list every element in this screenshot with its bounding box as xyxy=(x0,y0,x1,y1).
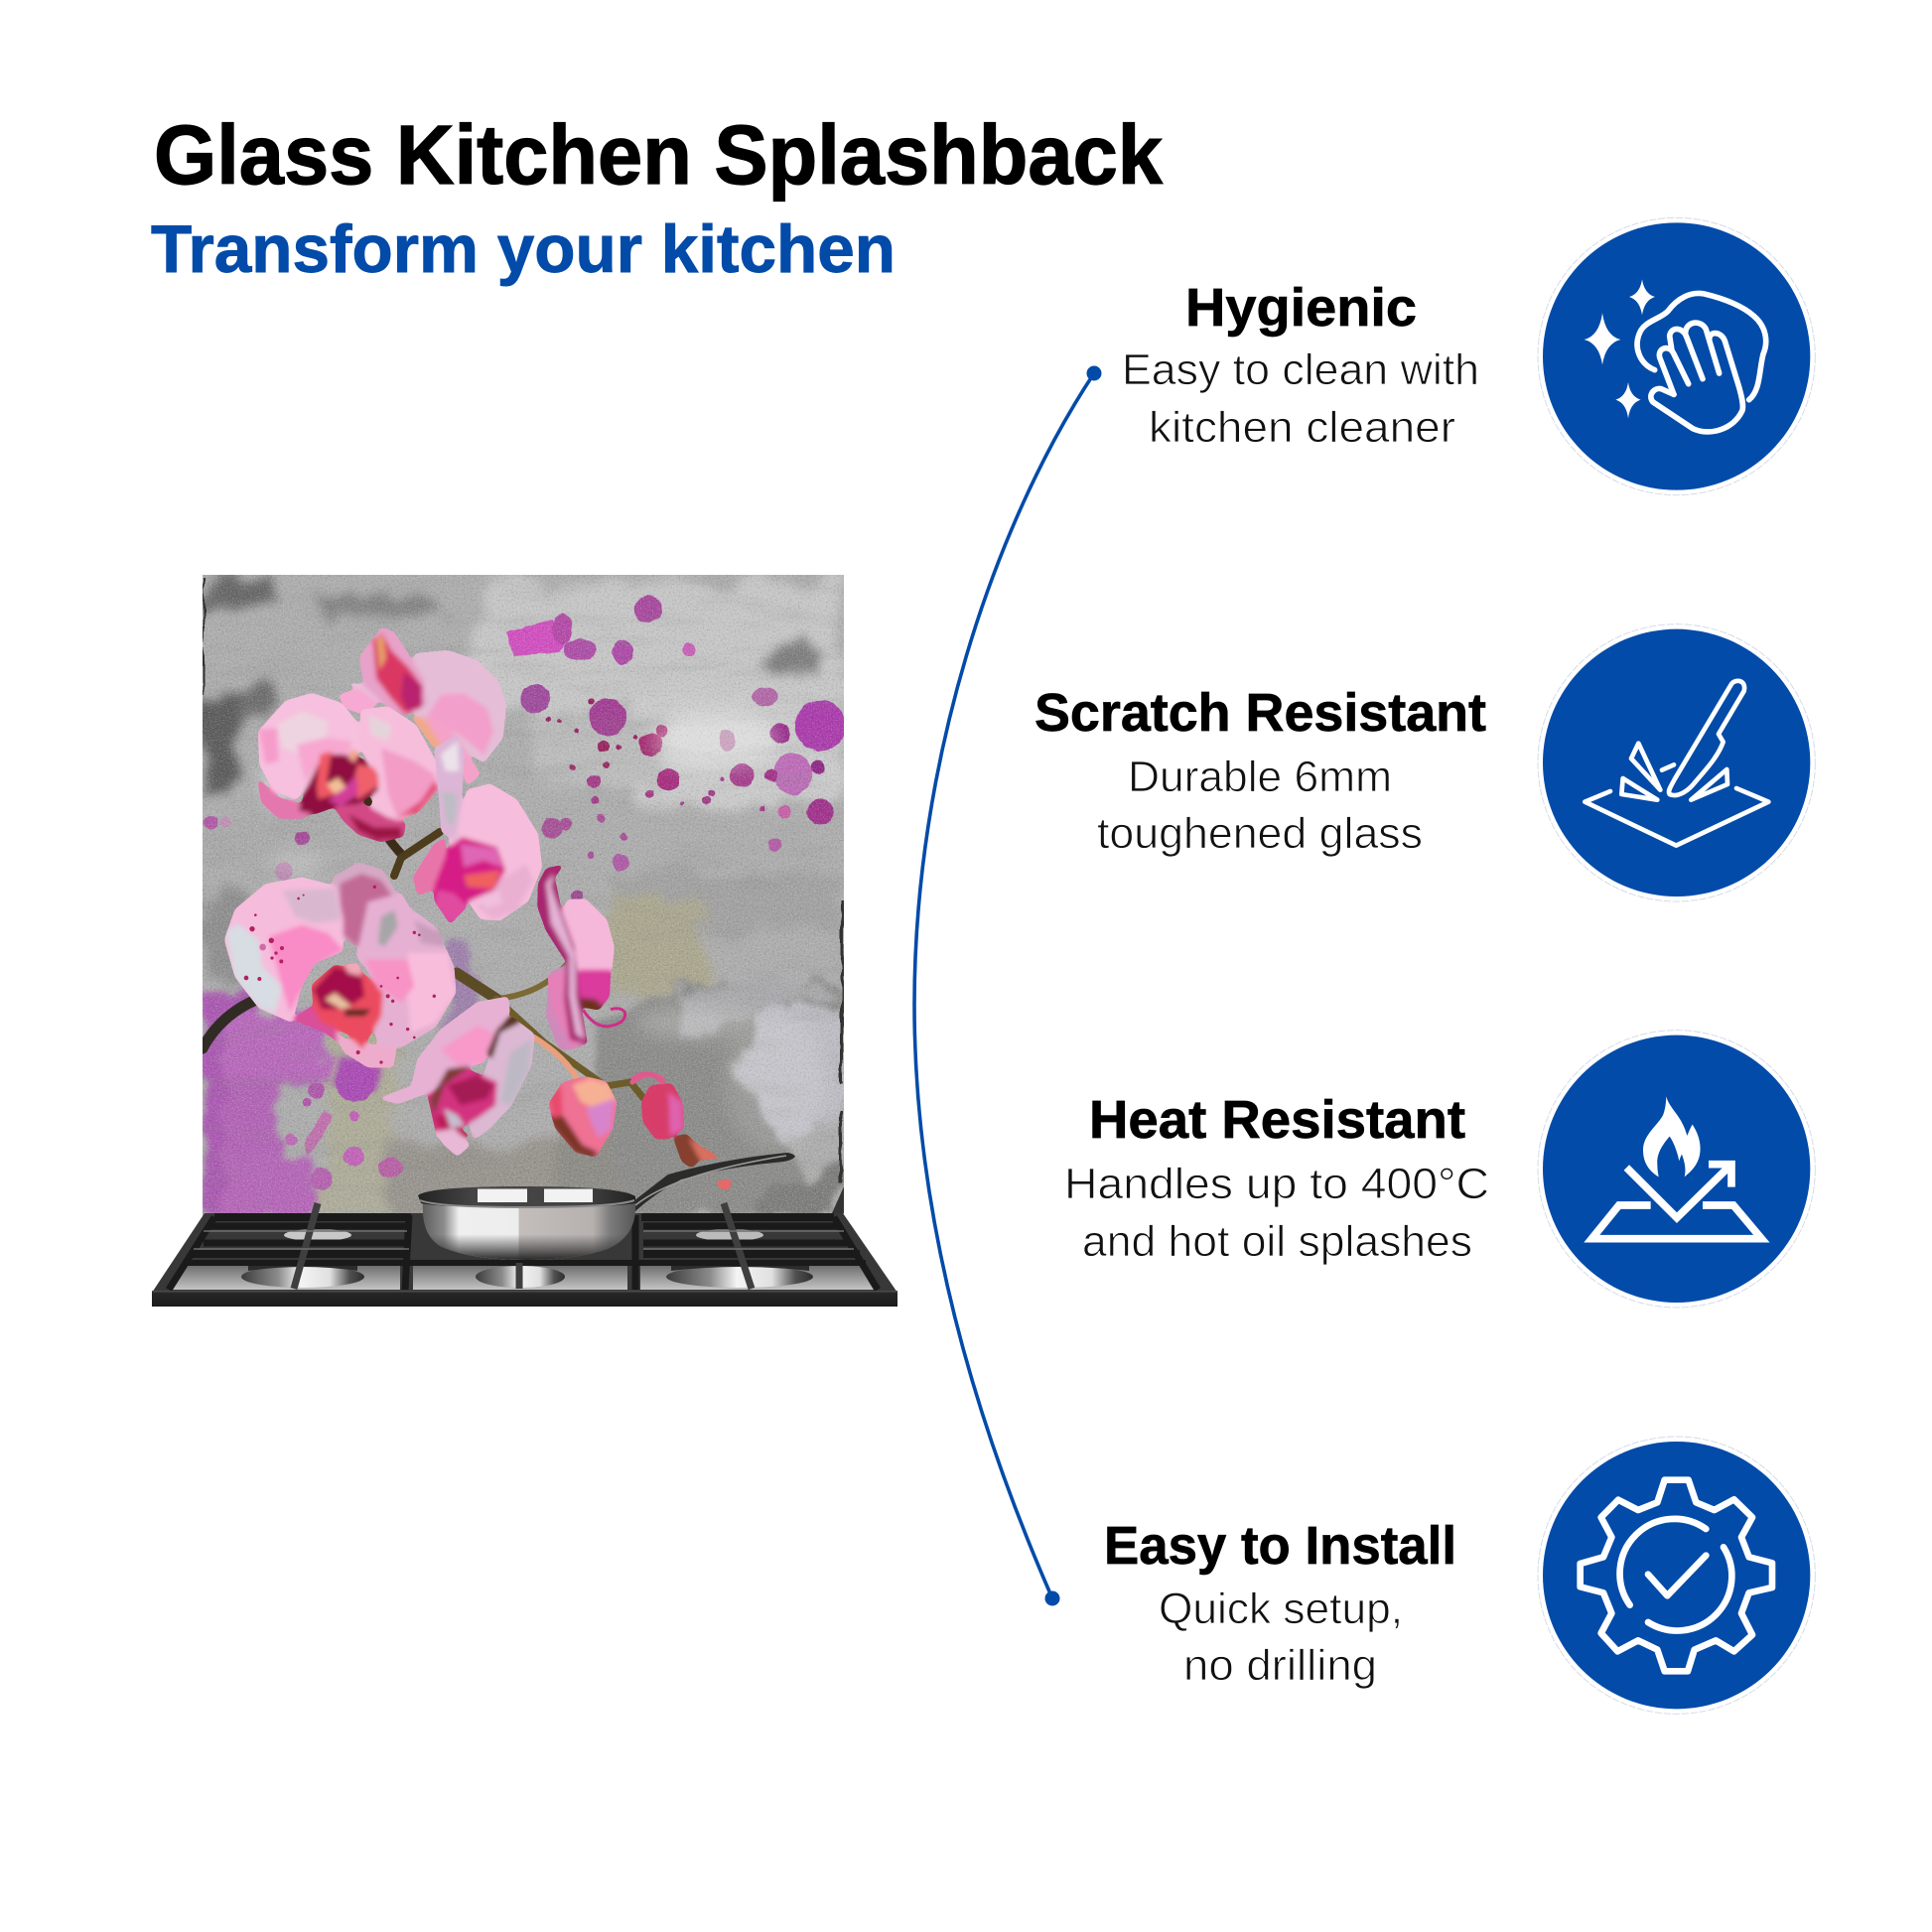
product image: splashback above gas hob xyxy=(152,575,897,1307)
flower: bottom centre orchid xyxy=(378,997,535,1157)
description: toughened glass xyxy=(1097,809,1423,858)
flower buds xyxy=(549,1073,732,1189)
description: no drilling xyxy=(1183,1641,1377,1690)
flower: upper left large orchid xyxy=(257,693,440,842)
hob burners xyxy=(241,1229,813,1288)
paint splatters xyxy=(205,596,846,1190)
icon: gear with check mark xyxy=(1538,1437,1815,1714)
pan handle xyxy=(633,1153,795,1213)
description: Easy to clean with xyxy=(1122,345,1479,394)
description xyxy=(1064,1160,1489,1266)
feature: Easy to Install xyxy=(1104,1516,1456,1690)
description xyxy=(1159,1585,1403,1690)
flower: centre right orchid xyxy=(413,735,542,925)
description: kitchen cleaner xyxy=(1149,403,1455,452)
heading: Heat Resistant xyxy=(1089,1090,1465,1150)
large grey brush strokes, lower right xyxy=(596,978,844,1216)
icon: flame over heat-reflecting surface xyxy=(1538,1031,1815,1308)
description xyxy=(1097,753,1423,858)
icon: hand wiping with sparkles xyxy=(1538,217,1815,495)
feature: Scratch Resistant xyxy=(1035,683,1486,858)
hob steel trays xyxy=(171,1266,878,1290)
heading: Easy to Install xyxy=(1104,1516,1456,1576)
texture overlays xyxy=(288,592,841,1084)
subtitle: Transform your kitchen xyxy=(151,211,896,287)
feature: Heat Resistant xyxy=(1064,1090,1489,1266)
gas hob xyxy=(152,1203,897,1307)
panel: orchid glass splashback xyxy=(203,575,846,1216)
heading: Hygienic xyxy=(1185,278,1417,338)
hob front edge xyxy=(152,1291,897,1307)
flower: right side-view orchid xyxy=(537,865,625,1049)
purple paint wash xyxy=(204,941,477,1216)
feature: Hygienic xyxy=(1122,278,1479,452)
description: and hot oil splashes xyxy=(1082,1217,1472,1266)
connector curve with end dots xyxy=(914,365,1102,1606)
white dry-brush highlights xyxy=(262,712,824,1152)
title: Glass Kitchen Splashback xyxy=(154,108,1163,202)
flower: top back orchid xyxy=(339,627,506,786)
description: Handles up to 400°C xyxy=(1064,1160,1489,1208)
flower: lower left large orchid xyxy=(224,863,456,1067)
orchid stems xyxy=(203,799,663,1098)
icon: knife on glass with shards xyxy=(1538,624,1815,901)
description: Quick setup, xyxy=(1159,1585,1403,1633)
hob grate bars xyxy=(169,1203,878,1290)
description: Durable 6mm xyxy=(1128,753,1392,801)
heading: Scratch Resistant xyxy=(1035,683,1486,743)
frying pan xyxy=(418,1153,795,1260)
pan rim xyxy=(418,1186,635,1207)
description xyxy=(1122,345,1479,452)
pan bowl xyxy=(423,1203,635,1260)
worn dark panel edges xyxy=(204,578,842,1181)
